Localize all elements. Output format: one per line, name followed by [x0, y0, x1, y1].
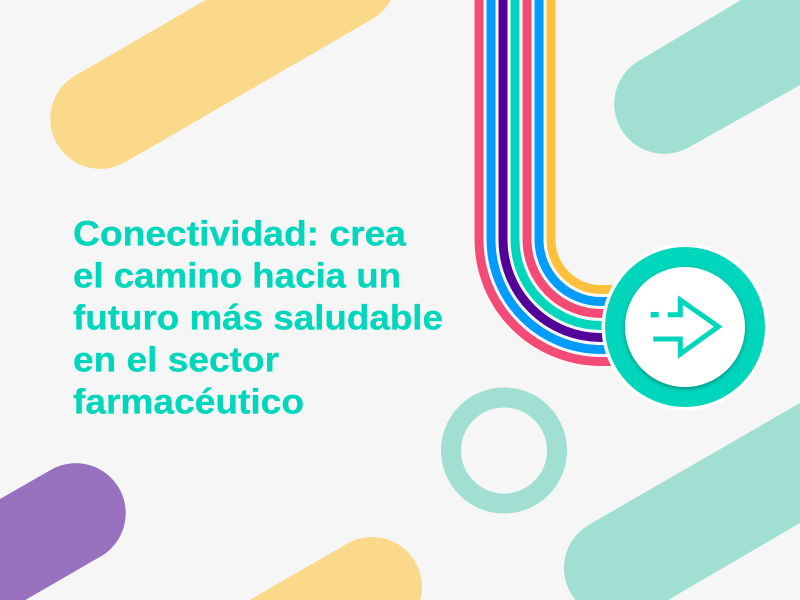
decorative ring: [451, 398, 557, 504]
icon: arrow: [651, 300, 718, 354]
decorative pill: teal bottom right: [564, 403, 800, 600]
title: el camino hacia un: [73, 256, 401, 296]
rainbow stripes: [479, 0, 640, 362]
badge: circular arrow icon: [602, 244, 768, 410]
decorative pill: teal top right: [614, 0, 800, 154]
decorative pill: yellow top left: [50, 0, 391, 169]
title: en el sector: [73, 340, 279, 380]
title: futuro más saludable: [73, 298, 443, 338]
title: farmacéutico: [73, 382, 304, 422]
decorative pill: yellow bottom centre: [249, 537, 422, 600]
title: Conectividad: crea: [73, 214, 407, 254]
title: [73, 214, 443, 422]
decorative pill: purple bottom left: [0, 463, 126, 600]
